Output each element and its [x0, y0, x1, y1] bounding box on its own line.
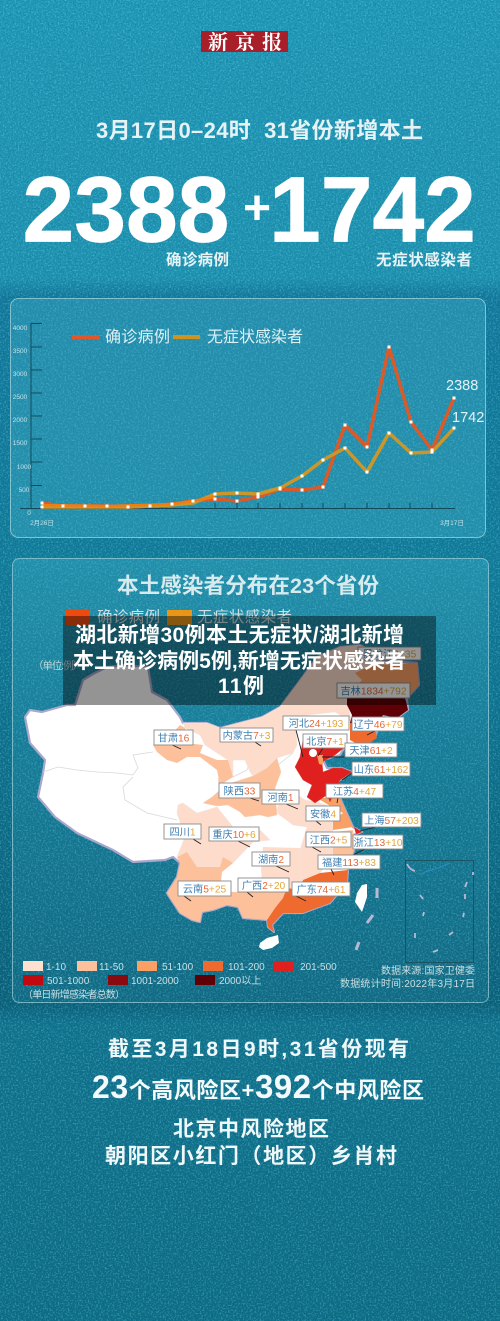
number: confirmed cases: 2388 [22, 158, 229, 262]
label: Guangxi: 广西2+20 [242, 880, 285, 892]
Sichuan and Chongqing [177, 803, 270, 867]
map series legend [66, 608, 292, 626]
line: asymptomatic [42, 428, 454, 507]
label: Shaanxi: 陕西33 [224, 784, 256, 798]
colour scale legend [23, 961, 337, 1001]
label: Shanghai: 上海57+203 [364, 814, 419, 827]
Henan [277, 793, 317, 827]
chart legend [72, 328, 303, 346]
risk line 1: 截至3月18日9时,31省份现有 [108, 1038, 409, 1061]
Beijing address: 朝阳区小红门（地区）乡肖村 [105, 1145, 397, 1168]
logo: 新京报: 新京报 [208, 31, 282, 54]
chart legend: 确诊病例 [105, 328, 170, 346]
label: Zhejiang: 浙江13+10 [354, 837, 403, 849]
label: Jilin: 吉林1834+792 [340, 684, 407, 698]
colour scale legend: 1001-2000 [131, 976, 179, 987]
label: Anhui: 安徽4 [310, 808, 336, 820]
colour scale legend: 51-100 [162, 962, 194, 973]
map title: 本土感染者分布在23个省份 [117, 573, 379, 598]
colour scale legend: 101-200 [228, 962, 265, 973]
overlay headline banner [63, 616, 436, 705]
y axis labels: 0 [27, 510, 31, 517]
label: Hebei: 河北24+193 [289, 718, 344, 730]
unit note: （单位:例） [33, 659, 83, 672]
chart legend: 无症状感染者 [207, 328, 303, 346]
label: Fujian [318, 855, 380, 869]
Anhui [307, 802, 333, 832]
x axis labels: 3月17日 [440, 519, 464, 527]
label: Yunnan [178, 881, 231, 896]
label: Sichuan: 四川1 [169, 828, 196, 838]
y axis labels: 2000 [13, 417, 28, 424]
label: Inner Mongolia: 内蒙古7+3 [223, 729, 271, 742]
Hebei and Shandong [295, 740, 352, 803]
y axis labels: 500 [19, 487, 30, 494]
overlay headline banner: 11例 [218, 675, 264, 698]
Jilin [347, 697, 408, 728]
end label: 2388: 2388 [446, 378, 478, 394]
label: Henan: 河南1 [267, 791, 294, 804]
Gansu [153, 725, 233, 785]
Yunnan [167, 852, 233, 922]
label: Gansu [154, 730, 193, 745]
label: Heilongjiang: 黑龙江2+35 [363, 648, 417, 660]
x axis labels [30, 519, 464, 527]
label: Liaoning: 辽宁46+79 [354, 718, 403, 731]
label: Anhui [306, 806, 340, 821]
label: Heilongjiang [358, 647, 421, 660]
chart axes [20, 323, 455, 508]
South China Sea dashes [356, 888, 377, 950]
x axis labels: 2月26日 [30, 519, 54, 527]
map series legend: 确诊病例 [97, 608, 160, 626]
label: Fujian: 福建113+83 [322, 856, 376, 869]
label: Shandong: 山东61+162 [354, 763, 409, 776]
headline date line: 3月17日0–24时 31省份新增本土 [96, 118, 423, 143]
Hunan [261, 847, 300, 892]
label: Jilin [337, 683, 410, 698]
Hainan [259, 935, 279, 950]
South China Sea inset [406, 860, 474, 962]
Tianjin [317, 755, 323, 765]
Guangxi [220, 888, 287, 920]
Shanghai [354, 827, 362, 834]
label: Guangdong [292, 882, 350, 896]
colour scale legend: 501-1000 [47, 976, 90, 987]
panel: line chart [10, 298, 486, 538]
y axis labels: 1000 [17, 464, 32, 471]
province label pointers [170, 730, 376, 901]
label: Shaanxi [219, 783, 260, 798]
footer: risk area summary [92, 1038, 424, 1168]
y axis labels: 1500 [13, 440, 28, 447]
y axis labels: 4000 [13, 325, 28, 332]
country base [25, 645, 419, 932]
label: Beijing: 北京7+1 [306, 735, 344, 748]
label: Hunan: 湖南2 [258, 853, 284, 866]
label: Jiangsu: 江苏4+47 [333, 785, 376, 798]
label: Chongqing [209, 827, 259, 841]
colour scale legend: 1-10 [46, 962, 66, 973]
internal borders of white provinces [43, 752, 293, 820]
label: Tianjin [345, 743, 397, 757]
label: Guangxi [238, 878, 289, 892]
plus sign: + [243, 182, 271, 235]
Inner Mongolia [183, 645, 375, 777]
caption: asymptomatic: 无症状感染者 [376, 250, 472, 269]
overlay headline banner: 本土确诊病例5例,新增无症状感染者 [73, 649, 406, 673]
panel: map [12, 558, 488, 1002]
end label: 1742: 1742 [452, 410, 484, 426]
Jiangsu [317, 798, 353, 830]
Beijing [309, 749, 317, 757]
label: Yunnan: 云南5+25 [183, 882, 226, 896]
map of China [25, 645, 474, 962]
number: asymptomatic: 1742 [269, 158, 476, 262]
label: Gansu: 甘肃16 [158, 732, 190, 744]
label: Henan [262, 790, 299, 804]
y axis labels: 3500 [13, 348, 28, 355]
Zhejiang [333, 830, 355, 867]
label: Chongqing: 重庆10+6 [212, 828, 256, 841]
province labels [154, 647, 421, 896]
colour scale legend: （单日新增感染者总数） [23, 988, 125, 1001]
map series legend: 无症状感染者 [197, 608, 292, 626]
Jiangxi [300, 827, 333, 890]
Taiwan [355, 884, 367, 912]
colour scale legend: 11-50 [99, 962, 124, 973]
label: Guangdong: 广东74+61 [296, 883, 346, 896]
data source note [340, 964, 475, 990]
label: Sichuan [164, 824, 201, 839]
label: Jiangxi: 江西2+5 [310, 834, 348, 846]
Guangdong and Fujian [267, 870, 348, 932]
label: Tianjin: 天津61+2 [349, 745, 393, 757]
headline numbers [22, 158, 476, 269]
data source note: 数据统计时间:2022年3月17日 [340, 977, 475, 990]
line: confirmed cases [42, 347, 454, 507]
highlight where lines overlap [42, 497, 215, 506]
y axis labels: 2500 [13, 394, 28, 401]
label: Hunan [252, 852, 290, 866]
overlay headline banner: 湖北新增30例本土无症状/湖北新增 [75, 623, 404, 647]
caption: confirmed: 确诊病例 [166, 250, 229, 269]
Liaoning [350, 723, 377, 747]
label: Jiangsu [326, 784, 383, 798]
risk line 2: 23个高风险区+392个中风险区 [92, 1068, 424, 1105]
data point markers [40, 346, 456, 508]
label: Beijing [303, 734, 347, 748]
Heilongjiang [347, 663, 419, 698]
data source note: 数据来源:国家卫健委 [381, 964, 475, 977]
Beijing heading: 北京中风险地区 [173, 1117, 329, 1141]
y axis labels [13, 325, 32, 517]
colour scale legend: 2000以上 [219, 975, 261, 987]
label: Hebei [283, 716, 349, 730]
label: Jiangxi [306, 832, 351, 847]
Shaanxi and neighbours [203, 758, 281, 817]
colour scale legend: 201-500 [300, 962, 337, 973]
y axis labels: 3000 [13, 371, 28, 378]
